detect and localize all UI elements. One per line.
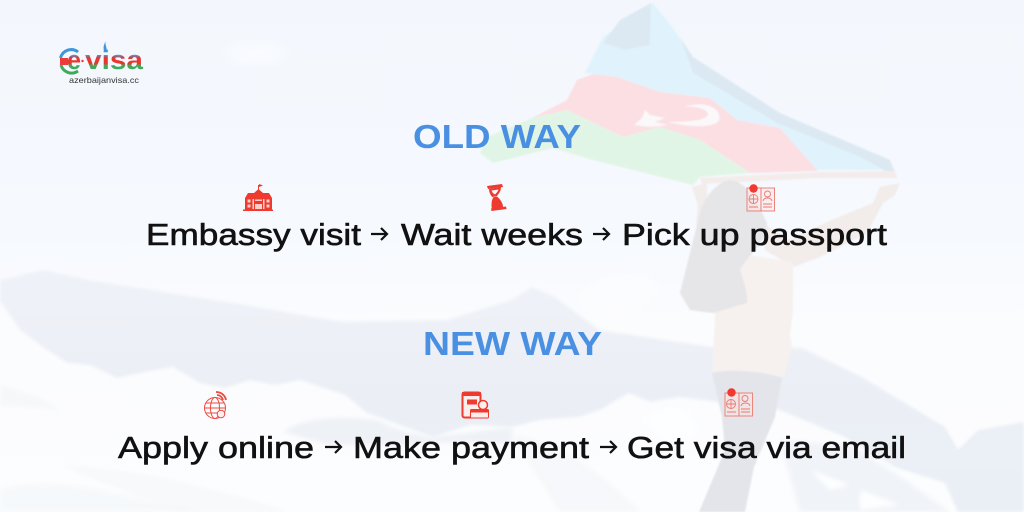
text: old way steps	[146, 217, 887, 252]
step: wait weeks: Wait weeks	[401, 217, 583, 252]
logo dot	[81, 60, 84, 62]
step: make payment: Make payment	[353, 430, 589, 465]
flag: blue band	[585, 3, 897, 177]
cloud in sky	[226, 45, 286, 61]
step: embassy visit: Embassy visit	[146, 217, 361, 252]
arrow 2	[593, 228, 609, 240]
arrow 1	[371, 228, 387, 240]
logo wordmark: visa	[85, 45, 144, 75]
icon: visa passport	[725, 388, 752, 416]
arrow 3	[325, 441, 341, 453]
woman: hair	[680, 180, 767, 313]
text: new way steps	[118, 430, 906, 465]
logo url: azerbaijanvisa.cc	[69, 75, 140, 85]
arrow 4	[600, 441, 616, 453]
flag: crescent and star	[634, 104, 719, 127]
icon: hourglass	[487, 184, 506, 211]
woman: shirt	[712, 250, 793, 377]
shaded lower mountain patch	[283, 418, 512, 445]
icon: globe with wifi	[204, 392, 226, 418]
mountain range	[0, 270, 1024, 512]
icon: embassy building	[243, 184, 273, 211]
logo mark: tri-colour circle	[60, 50, 78, 73]
raised pole edge	[700, 171, 897, 184]
woman: trousers	[699, 371, 782, 512]
step: get visa via email: Get visa via email	[627, 430, 906, 465]
logo: e-visa	[60, 41, 144, 85]
lower right snow slopes	[0, 385, 950, 512]
flag: green band	[480, 110, 750, 185]
flag: shadow fold	[603, 3, 897, 177]
step: pick up passport: Pick up passport	[622, 217, 887, 252]
white cloud highlights	[575, 274, 900, 510]
heading: new way: NEW WAY	[423, 325, 602, 362]
step: apply online: Apply online	[118, 430, 314, 465]
photo: woman holding flag	[480, 3, 900, 512]
logo letter e: e	[67, 45, 81, 75]
icon: mobile payment	[462, 392, 488, 418]
flag: red band	[532, 74, 818, 173]
heading: old way: OLD WAY	[413, 118, 581, 155]
logo flame	[104, 41, 107, 52]
woman: arms	[692, 183, 900, 267]
icon: passport	[747, 184, 774, 211]
